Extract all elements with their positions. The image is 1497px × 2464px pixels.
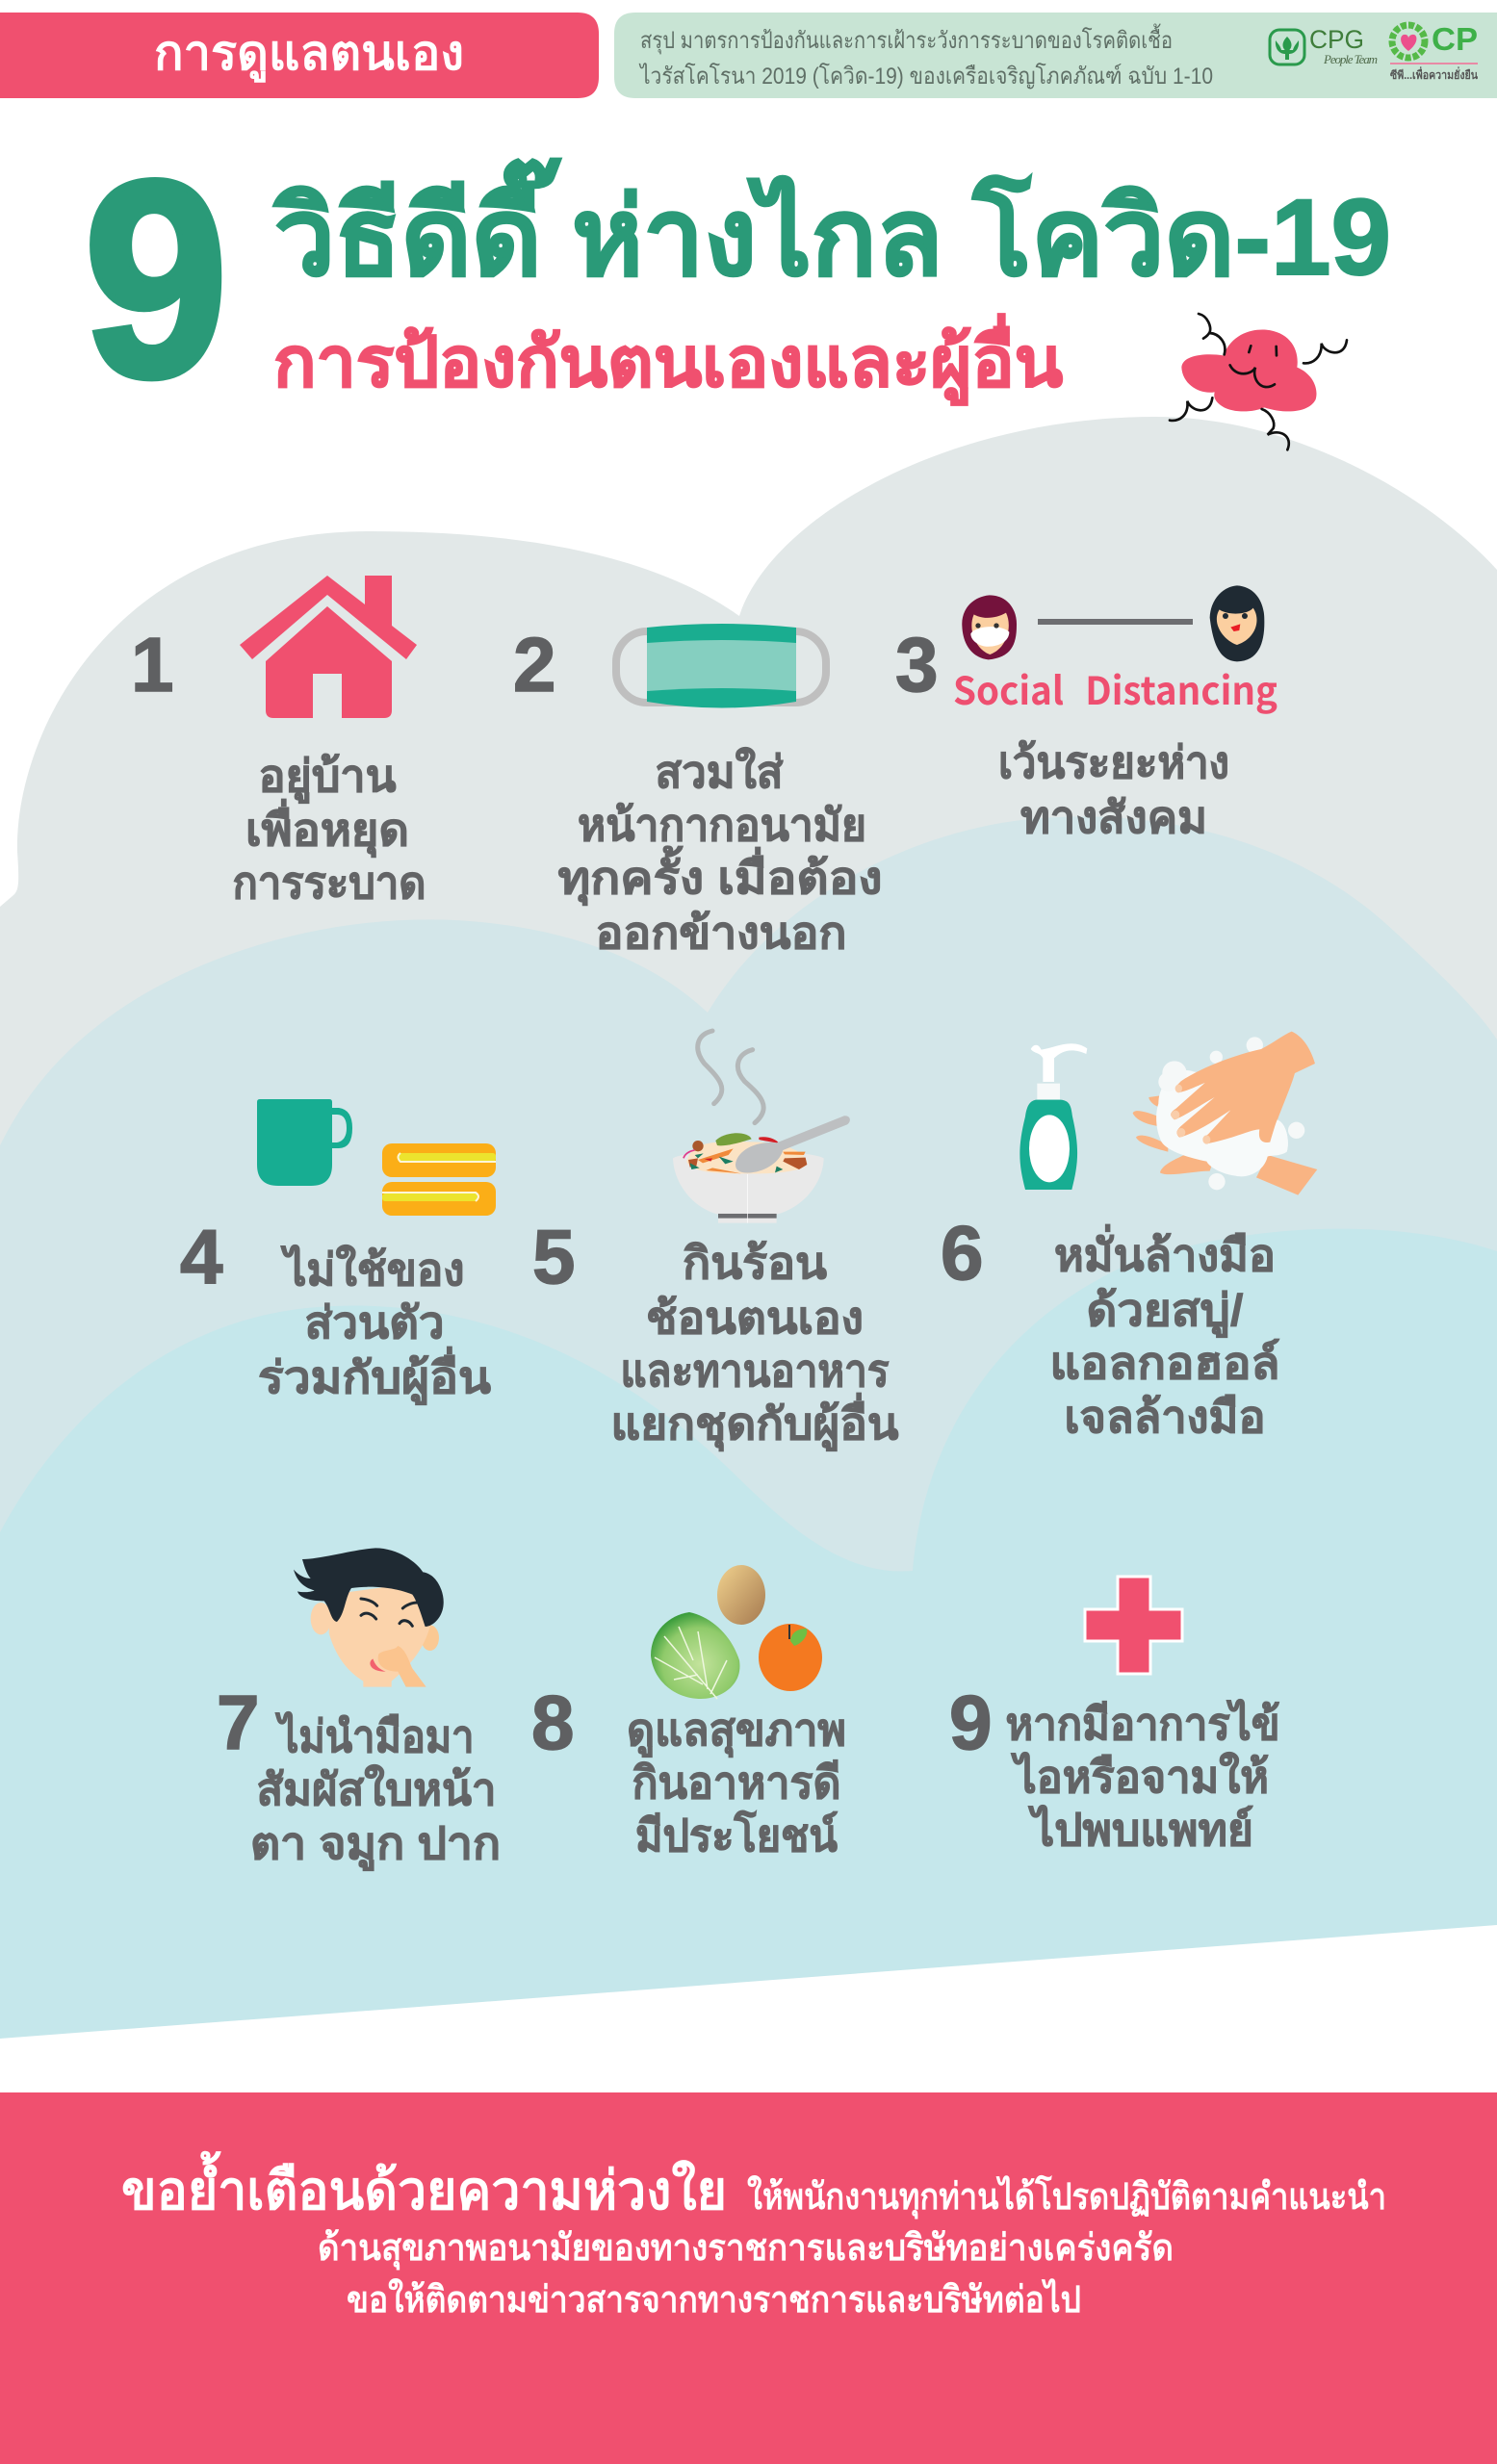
icon: egg [717, 1565, 765, 1625]
header: green summary banner [614, 13, 1497, 98]
header: pink section tab [0, 13, 599, 98]
item 7: don't touch face [217, 1548, 501, 1871]
item 3 text [998, 737, 1229, 842]
summary text: ไวรัสโคโรนา 2019 (โควิด-19) ของเครือเจริญโภคภัณฑ์ ฉบับ 1-10 [638, 63, 1213, 90]
background: pale blue cloud layer [0, 816, 1497, 2040]
item 6 text: ด้วยสบู่/ [1086, 1285, 1244, 1338]
background: aqua cloud layer [0, 1229, 1497, 2039]
item 3: social distancing [895, 585, 1278, 842]
label: Social Distancing: Social Distancing [953, 660, 1278, 716]
item 2 text: ออกข้างนอก [595, 908, 847, 958]
logo: CPG People Team: CPG [1309, 25, 1364, 54]
number 4: 4 [180, 1214, 223, 1299]
item 1 text: อยู่บ้าน [258, 751, 397, 804]
item 8: healthy food [531, 1565, 846, 1861]
item 4 text: ร่วมกับผู้อื่น [258, 1347, 492, 1405]
footer body text: ให้พนักงานทุกท่านได้โปรดปฏิบัติตามคำแนะนำ [747, 2174, 1386, 2220]
number 1: 1 [131, 622, 173, 707]
item 7 text [250, 1711, 501, 1871]
item 7 text: ไม่นำมือมา [274, 1711, 474, 1761]
icon: mug [257, 1099, 352, 1186]
item 9 text [1005, 1699, 1280, 1855]
number 7: 7 [217, 1680, 260, 1765]
title: main heading: วิธีดีดี๊ ห่างไกล โควิด-19 [273, 158, 1391, 297]
icon: smiling pink virus [1170, 314, 1347, 449]
item 3 text: ทางสังคม [1020, 792, 1207, 842]
item 8 text: มีประโยชน์ [635, 1810, 839, 1861]
item 9 text: ไปพบแพทย์ [1027, 1805, 1253, 1855]
item 5 text: และทานอาหาร [620, 1346, 890, 1396]
item 2 text: หน้ากากอนามัย [578, 800, 866, 850]
item 3 text: เว้นระยะห่าง [998, 737, 1229, 787]
footer emphasis: ขอย้ำเตือนด้วยความห่วงใย [121, 2151, 727, 2220]
footer body text: ขอให้ติดตามข่าวสารจากทางราชการและบริษัทต่อไป [347, 2278, 1081, 2321]
item 8 text: กินอาหารดี [632, 1758, 841, 1808]
header tab text: การดูแลตนเอง [154, 26, 464, 83]
item 5 text: กินร้อน [683, 1238, 828, 1288]
logo: CP for sustainability [1390, 21, 1479, 82]
footer panel: reminder [0, 2092, 1497, 2464]
title: big numeral 9: 9 [84, 123, 228, 435]
item 1 text [233, 751, 426, 908]
number 2: 2 [513, 622, 556, 707]
footer body text: ด้านสุขภาพอนามัยของทางราชการและบริษัทอย่างเคร่งครัด [318, 2228, 1174, 2271]
number 9: 9 [949, 1680, 992, 1765]
icon: pump soap bottle [1020, 1043, 1087, 1190]
number 5: 5 [532, 1214, 576, 1299]
item 9 text: ไอหรือจามให้ [1010, 1751, 1269, 1802]
icon: boy touching his face [294, 1548, 444, 1687]
item 6: wash hands [941, 1032, 1317, 1442]
icon: orange [759, 1624, 822, 1691]
logo: CP for sustainability: CP [1432, 21, 1478, 57]
icon: hands washing with foam [1133, 1032, 1317, 1195]
item 8 text [627, 1705, 846, 1861]
item 5 text [610, 1238, 899, 1451]
item 7 text: สัมผัสใบหน้า [256, 1763, 497, 1814]
item 2 text: ทุกครั้ง เมื่อต้อง [558, 845, 882, 906]
item 7 text: ตา จมูก ปาก [250, 1818, 501, 1871]
item 5 text: แยกชุดกับผู้อื่น [610, 1393, 899, 1451]
icon: woman without mask [1210, 585, 1264, 661]
background: grey cloud layer [0, 417, 1497, 2040]
item 5 text: ช้อนตนเอง [646, 1293, 864, 1343]
item 9: see a doctor [949, 1577, 1280, 1855]
item 6 text: เจลล้างมือ [1065, 1392, 1265, 1442]
connector line [1038, 619, 1193, 625]
item 1 text: การระบาด [233, 858, 426, 908]
icon: cabbage [651, 1612, 739, 1699]
item 4 text [258, 1244, 492, 1405]
item 5: eat hot food with own spoon [532, 1031, 899, 1451]
summary text: สรุป มาตรการป้องกันและการเฝ้าระวังการระบาดของโรคติดเชื้อ [640, 23, 1173, 55]
item 1 text: เพื่อหยุด [245, 799, 409, 858]
icon: folded towels [382, 1143, 496, 1216]
subtitle: การป้องกันตนเองและผู้อื่น [273, 313, 1063, 406]
item 2 text: สวมใส่ [655, 746, 784, 797]
number 3: 3 [895, 622, 938, 707]
item 6 text: แอลกอฮอล์ [1049, 1338, 1280, 1388]
logo: CP for sustainability: ซีพี...เพื่อความยั่งยืน [1390, 66, 1479, 82]
icon: woman with mask [962, 595, 1017, 659]
footer body text [318, 2174, 1386, 2321]
item 9 text: หากมีอาการไข้ [1005, 1699, 1280, 1749]
summary text [638, 23, 1213, 90]
item 8 text: ดูแลสุขภาพ [627, 1705, 846, 1758]
logo: CPG People Team: People Team [1323, 52, 1378, 66]
icon: medical cross [1085, 1577, 1182, 1674]
white band under clouds [0, 1925, 1497, 2092]
item 1: stay home [131, 576, 426, 908]
item 6 text: หมั่นล้างมือ [1054, 1224, 1276, 1280]
item 2: wear a mask [513, 622, 882, 958]
number 6: 6 [941, 1210, 984, 1296]
icon: steaming bowl with spoon [673, 1031, 850, 1223]
item 2 text [558, 746, 882, 958]
number 8: 8 [531, 1680, 574, 1765]
item 6 text [1049, 1224, 1280, 1442]
item 4 text: ไม่ใช้ของ [280, 1244, 464, 1295]
item 4 text: ส่วนตัว [304, 1297, 445, 1348]
icon: face mask [616, 624, 826, 708]
icon: house [240, 576, 417, 718]
logo: CPG People Team [1270, 25, 1378, 66]
item 4: don't share personal items [180, 1099, 496, 1405]
